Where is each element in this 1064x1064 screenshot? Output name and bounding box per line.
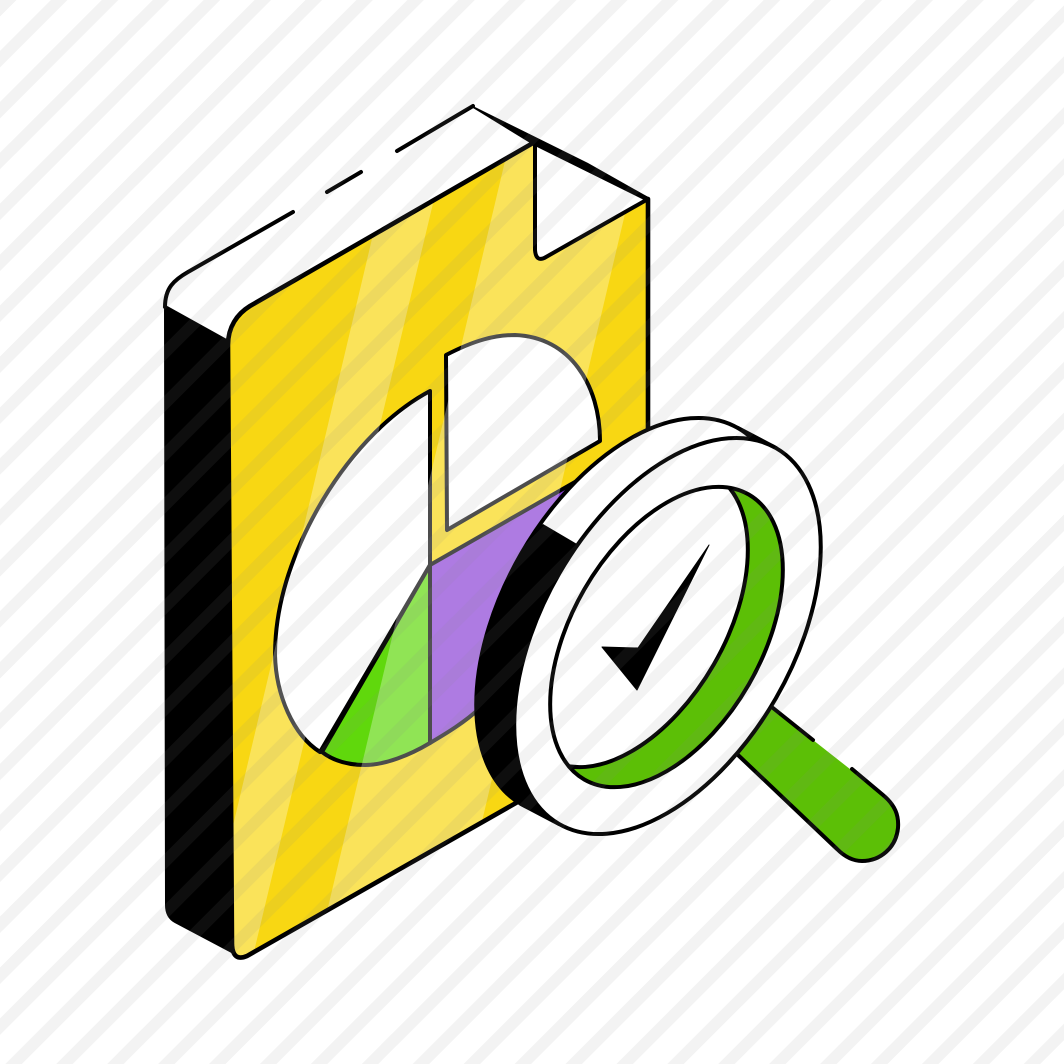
- pie slice: top right white: [446, 335, 600, 530]
- pie slice: purple: [430, 482, 575, 743]
- handle outline: [738, 708, 898, 861]
- rim wall white: [521, 428, 776, 824]
- handle: [730, 700, 898, 861]
- document top face: [165, 106, 535, 341]
- icon: check mark: [602, 545, 709, 690]
- band left: [234, 203, 433, 956]
- handle fill: [730, 700, 898, 861]
- document left side: [165, 307, 243, 958]
- magnifying glass: [474, 416, 900, 863]
- green inner wall: [502, 447, 831, 827]
- pie slice: green: [322, 565, 430, 765]
- band right: [325, 140, 640, 920]
- glass reflection bands: [225, 140, 640, 960]
- fold top thick edge: [473, 106, 650, 202]
- document front face: [228, 143, 648, 958]
- front ring: [451, 386, 884, 886]
- pie slice: large white: [275, 391, 430, 752]
- document: [165, 106, 650, 960]
- inner ring outline: [502, 447, 831, 827]
- rim back wall: [474, 416, 778, 826]
- rim tangent edges: [521, 428, 776, 824]
- lens: [552, 488, 750, 770]
- rim wall black part: [478, 524, 576, 810]
- top face dashed back edge: [165, 106, 473, 342]
- document outline: [228, 143, 648, 958]
- rim back ellipse: [413, 366, 846, 866]
- fold corner: [535, 143, 648, 259]
